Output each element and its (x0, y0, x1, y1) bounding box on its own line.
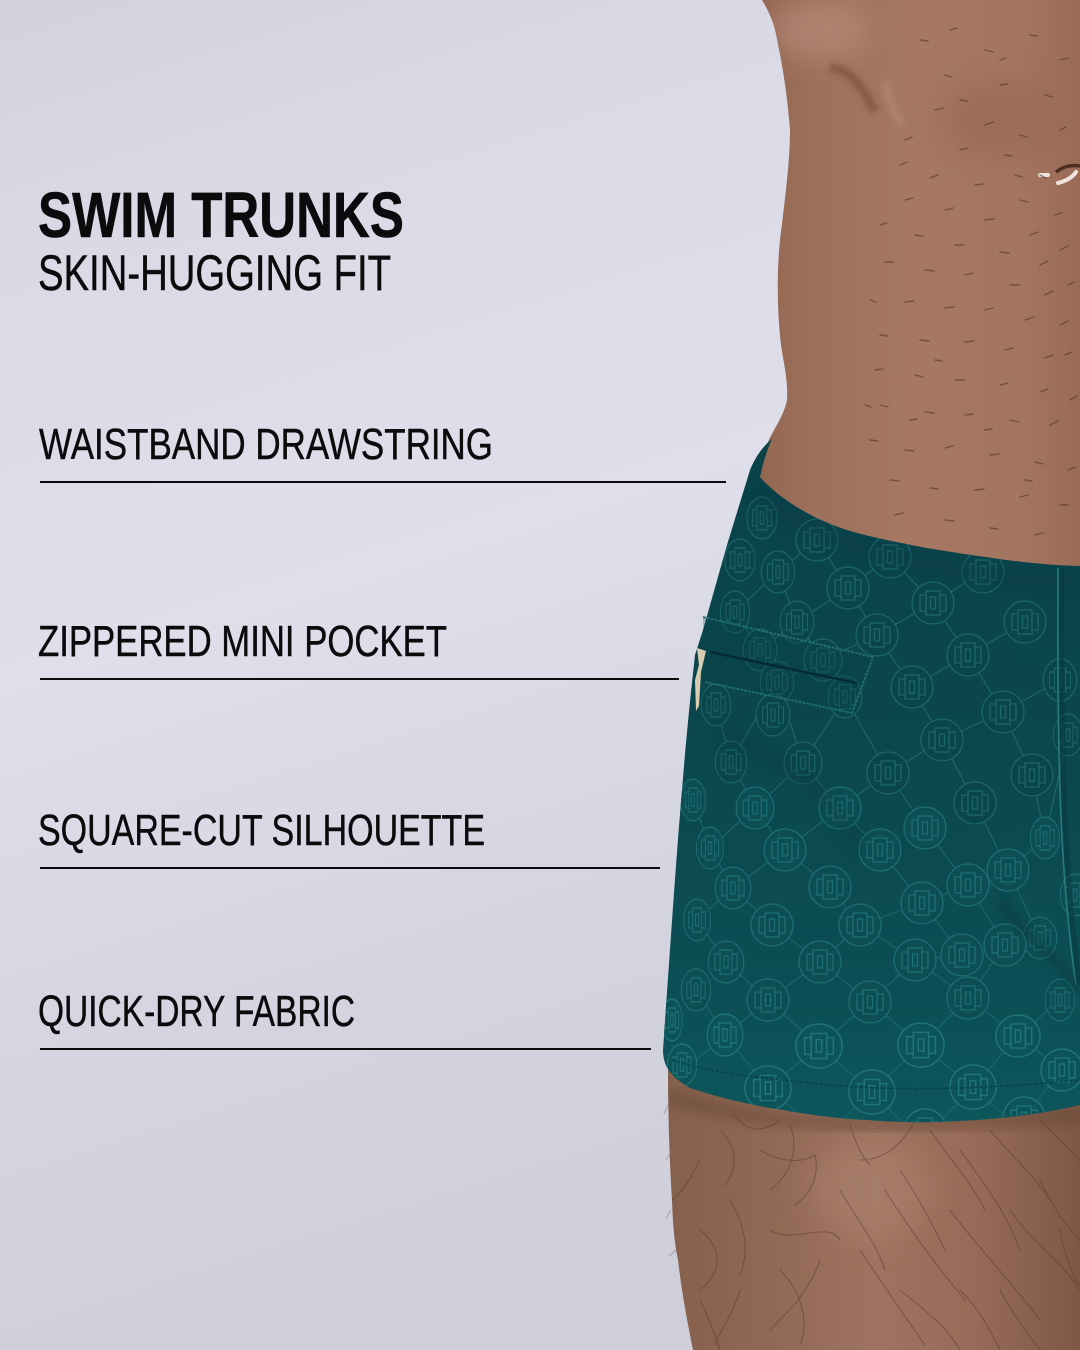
crotch fold (1005, 904, 1079, 990)
leg hair (672, 1115, 1080, 1350)
title: SWIM TRUNKS (38, 179, 404, 251)
navel (1056, 166, 1080, 172)
monogram medallions: upper (701, 497, 1080, 824)
leg edge hairs (664, 1100, 676, 1256)
photo: torso (760, 0, 1080, 566)
hem stitch (672, 1060, 1080, 1089)
photo: leg (660, 1060, 1080, 1350)
photo: teal trunks (650, 430, 1080, 1151)
monogram lattice lines (693, 540, 1068, 1125)
feature: quick-dry fabric: QUICK-DRY FABRIC (38, 987, 355, 1036)
subtitle: SKIN-HUGGING FIT (38, 245, 391, 301)
feature: zippered mini pocket: ZIPPERED MINI POCKET (38, 617, 447, 666)
feature: waistband drawstring: WAISTBAND DRAWSTRING (39, 420, 493, 469)
icon: zipper pocket (695, 617, 873, 713)
fold shading (720, 730, 860, 850)
waist shadow (756, 496, 1004, 584)
monogram medallions: lower (680, 779, 1080, 1023)
stubble (865, 28, 1077, 535)
rib crease (830, 68, 875, 112)
center seam (1058, 568, 1076, 985)
feature: square-cut silhouette: SQUARE-CUT SILHOUETTE (38, 806, 485, 855)
